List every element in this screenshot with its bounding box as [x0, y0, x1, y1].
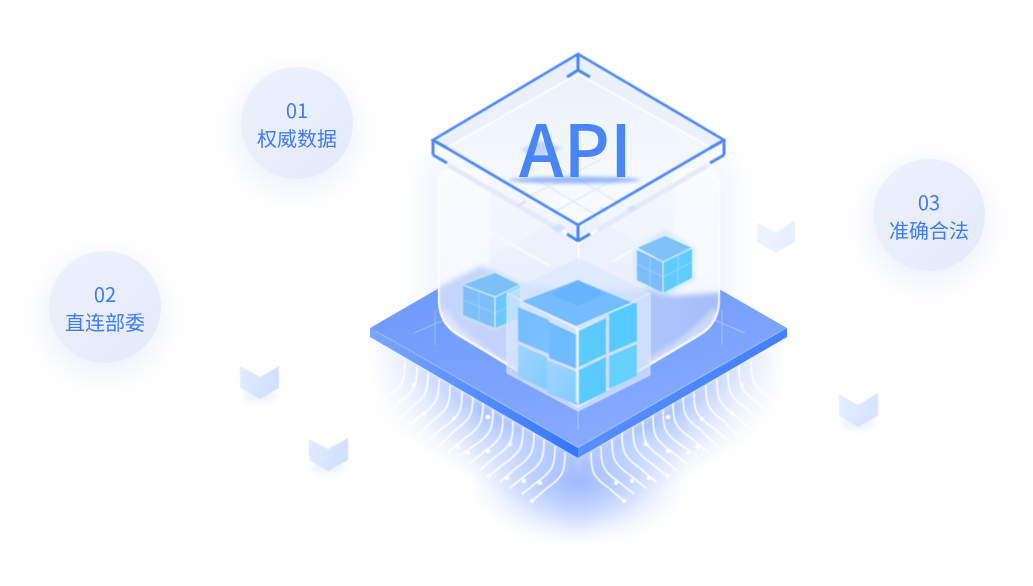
cube top [520, 280, 635, 327]
lid wireframe [433, 54, 724, 241]
floating cube: upper right [757, 220, 795, 253]
circle: 03 准确合法 [868, 159, 988, 284]
cube right blocks [579, 318, 606, 367]
title: API: API [519, 93, 632, 198]
number 01: 01 [286, 95, 308, 124]
cube left blocks [518, 307, 549, 354]
cube white edges [520, 301, 632, 327]
platform top [370, 208, 787, 448]
glass body [438, 168, 720, 408]
bracket bottom [567, 225, 590, 241]
glow under the platform [381, 346, 775, 538]
bracket left [433, 139, 447, 163]
floating cube: far right [839, 393, 878, 430]
circle: 01 权威数据 [236, 67, 356, 192]
halo around glass box [425, 160, 732, 320]
glass box [432, 165, 726, 415]
big cube [507, 258, 650, 411]
floating cube: lower left one [240, 366, 279, 402]
label: 准确合法: 准确合法 [889, 220, 969, 243]
number 03: 03 [918, 187, 940, 216]
platform left side [370, 328, 578, 458]
glass outline [439, 178, 719, 407]
small cube: left [461, 270, 524, 331]
circuit traces [375, 362, 565, 503]
small cube: right [634, 230, 695, 297]
circuit traces mirrored [591, 362, 781, 503]
glass interior [438, 232, 720, 405]
floating cube: lower left two [309, 438, 348, 474]
circle: 02 直连部委 [44, 251, 164, 376]
bracket top [567, 54, 590, 77]
number 02: 02 [94, 279, 116, 308]
outer translucent shell [507, 258, 650, 411]
api text shadow [509, 141, 641, 183]
platform [370, 208, 787, 458]
bracket right [710, 139, 724, 163]
label: 权威数据: 权威数据 [257, 128, 337, 151]
lid glass plane [433, 55, 724, 233]
platform right side [578, 328, 787, 458]
label: 直连部委: 直连部委 [65, 312, 145, 335]
